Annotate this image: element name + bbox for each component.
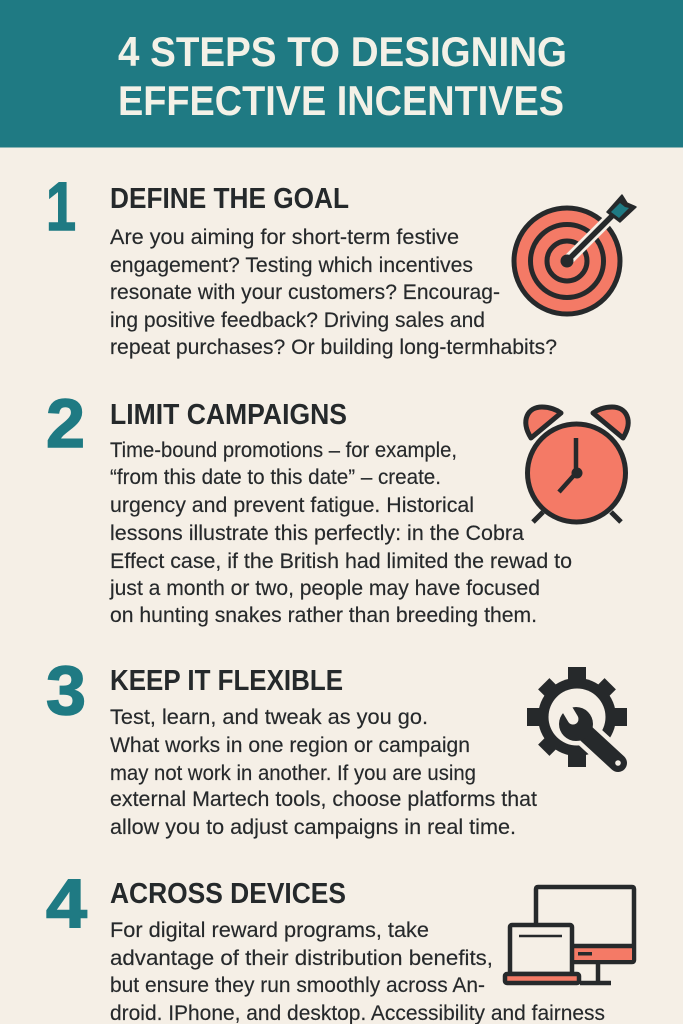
step 1: define the goal bbox=[46, 168, 636, 359]
header banner bbox=[0, 0, 683, 148]
step 2 body text: on hunting snakes rather than breeding them. bbox=[110, 604, 537, 627]
step 4 body text bbox=[110, 919, 605, 1024]
step 3 body text: Test, learn, and tweak as you go. bbox=[110, 706, 428, 729]
icon: monitor and laptop bbox=[505, 887, 634, 983]
step 2 body text: lessons illustrate this perfectly: in the Cobra bbox=[110, 522, 524, 545]
step 2 body text: Effect case, if the British had limited the rewad to bbox=[110, 550, 572, 573]
step 3 body text: external Martech tools, choose platforms that bbox=[110, 788, 537, 811]
step 2 body text: just a month or two, people may have focused bbox=[109, 577, 540, 600]
title: 4 STEPS TO DESIGNING bbox=[118, 28, 567, 75]
step 2 body text: Time-bound promotions – for example, bbox=[110, 439, 457, 462]
step 2 body text: “from this date to this date” – create. bbox=[110, 466, 441, 489]
icon: gear with wrench bbox=[527, 667, 627, 767]
step 3 body text: may not work in another. If you are using bbox=[110, 762, 476, 785]
icon: alarm clock bbox=[526, 407, 628, 522]
step 2 body text: urgency and prevent fatigue. Historical bbox=[110, 494, 474, 517]
step 1 heading: DEFINE THE GOAL bbox=[110, 183, 349, 215]
step 2 heading: LIMIT CAMPAIGNS bbox=[110, 399, 347, 431]
step number 2: 2 bbox=[46, 385, 85, 462]
icon: target with arrow bbox=[514, 195, 636, 314]
step 2: limit campaigns bbox=[46, 385, 628, 627]
step 2 body text bbox=[109, 439, 572, 627]
step 4: across devices bbox=[46, 865, 634, 1024]
title: EFFECTIVE INCENTIVES bbox=[118, 77, 564, 124]
step 3: keep it flexible bbox=[46, 652, 627, 839]
step 4 heading: ACROSS DEVICES bbox=[110, 878, 346, 910]
step number 1: 1 bbox=[46, 168, 76, 245]
title bbox=[118, 28, 567, 124]
step 3 body text: What works in one region or campaign bbox=[110, 734, 470, 757]
step 1 body text bbox=[110, 226, 557, 359]
step 1 body text: engagement? Testing which incentives bbox=[110, 254, 473, 277]
step 1 body text: resonate with your customers? Encourag- bbox=[110, 281, 500, 304]
step 4 body text: For digital reward programs, take bbox=[110, 919, 429, 942]
step number 3: 3 bbox=[46, 652, 86, 729]
step 3 body text: allow you to adjust campaigns in real time. bbox=[110, 816, 516, 839]
step 1 body text: ing positive feedback? Driving sales and bbox=[110, 309, 485, 332]
step number 4: 4 bbox=[46, 865, 87, 942]
step 3 body text bbox=[110, 706, 537, 839]
step 1 body text: Are you aiming for short-term festive bbox=[110, 226, 459, 249]
step 4 body text: but ensure they run smoothly across An- bbox=[110, 974, 485, 997]
step 4 body text: advantage of their distribution benefits, bbox=[110, 947, 493, 970]
step 1 body text: repeat purchases? Or building long-termhabits? bbox=[110, 336, 557, 359]
step 3 heading: KEEP IT FLEXIBLE bbox=[110, 665, 343, 697]
